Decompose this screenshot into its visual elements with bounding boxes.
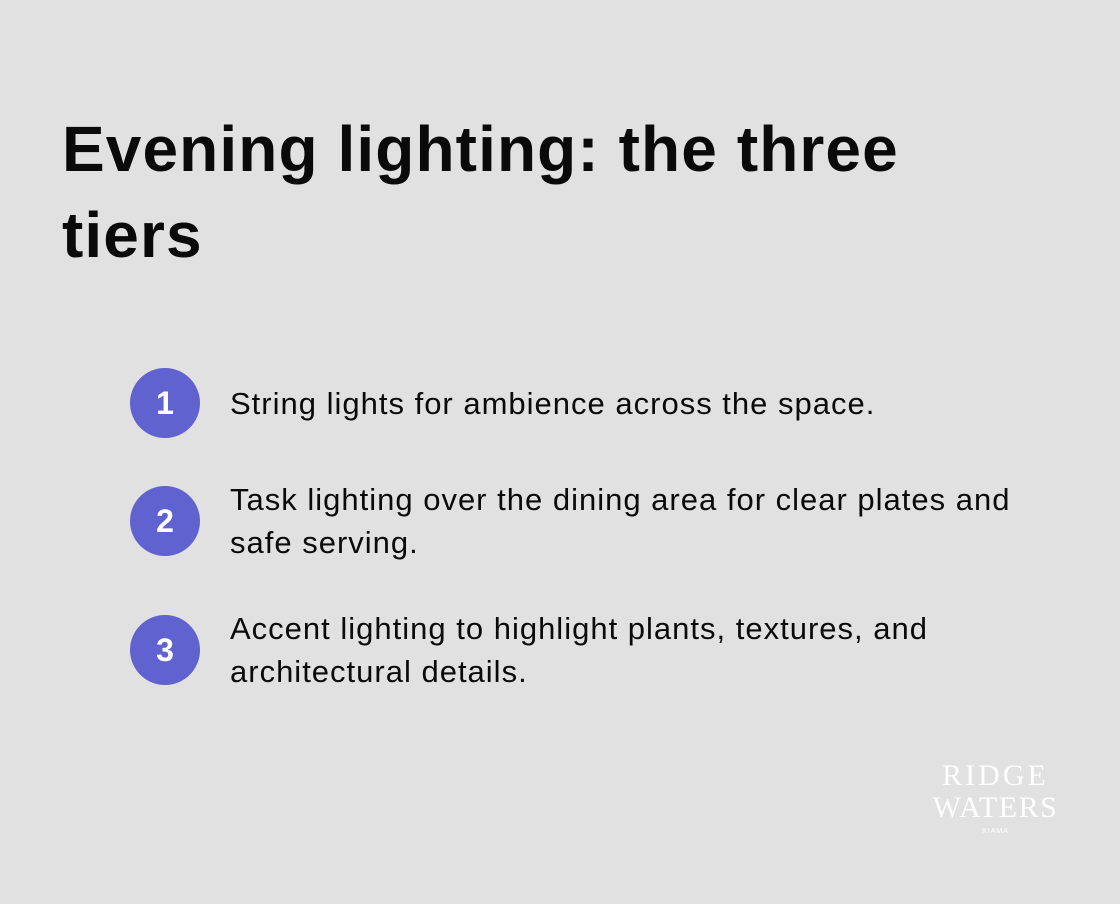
item 1 <box>130 368 875 438</box>
text 3: Accent lighting to highlight plants, textures, and architectural details. <box>230 611 928 689</box>
text 2: Task lighting over the dining area for clear plates and safe serving. <box>230 482 1010 560</box>
title: Evening lighting: the three tiers <box>62 113 899 271</box>
item 2 <box>130 482 1010 560</box>
item 3 <box>130 611 928 689</box>
icon: number 1: 1 <box>156 385 174 421</box>
icon: number 2 <box>130 486 200 556</box>
logo <box>932 759 1058 835</box>
logo: KIAMA <box>982 828 1009 835</box>
icon: number 2: 2 <box>156 503 174 539</box>
text 1: String lights for ambience across the space. <box>230 386 875 421</box>
logo: WATERS <box>933 791 1058 824</box>
logo: RIDGE <box>942 759 1049 792</box>
icon: number 3: 3 <box>156 632 174 668</box>
icon: number 1 <box>130 368 200 438</box>
icon: number 3 <box>130 615 200 685</box>
